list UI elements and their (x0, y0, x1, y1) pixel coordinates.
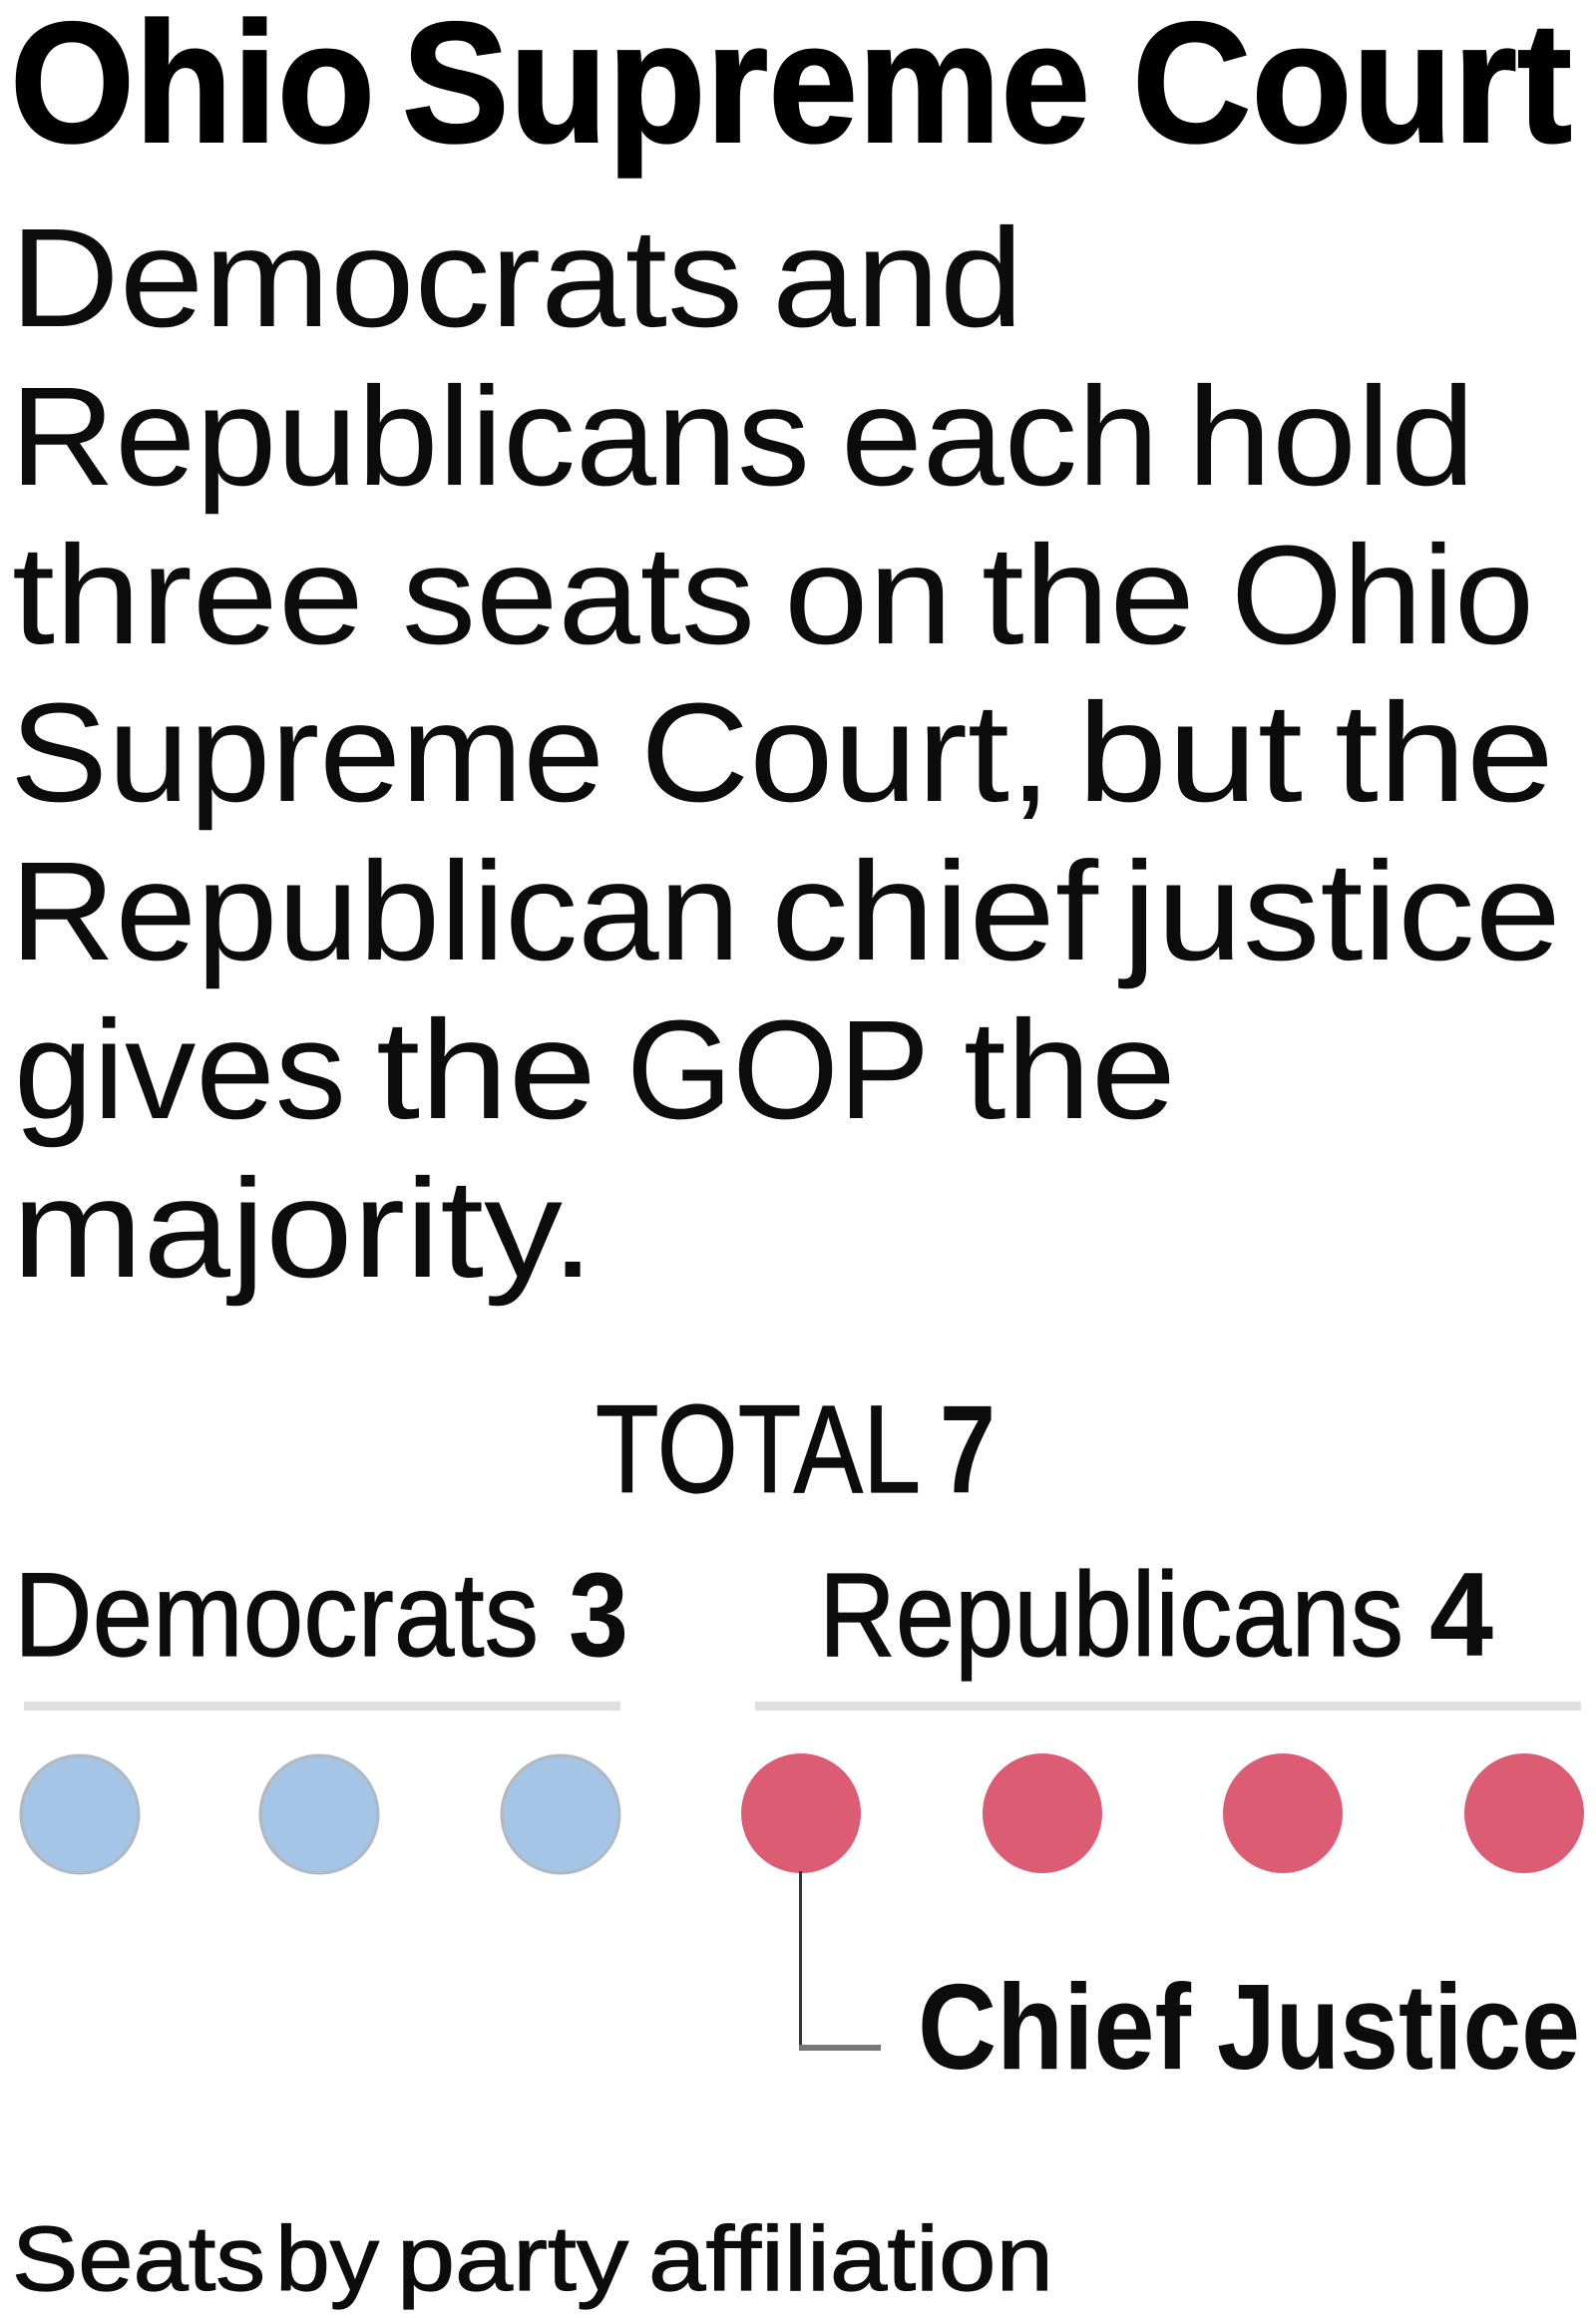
text block: description: chief (771, 832, 1099, 989)
text block: description: gives (14, 990, 346, 1148)
Democrat seats (21, 1755, 619, 1873)
text block: description: Republican (10, 832, 740, 989)
label: Republicans count: 4 (1429, 1548, 1493, 1682)
label: Chief Justice (918, 1959, 1580, 2095)
label: Democrats count: 3 (569, 1548, 628, 1682)
text block: description: Court, (640, 673, 1051, 831)
text block: description: Republicans (10, 357, 810, 515)
text block: description: hold (1187, 357, 1475, 515)
text block: description: majority. (12, 1149, 595, 1307)
Republican seats (741, 1753, 1584, 1873)
label: Republicans count: Republicans (819, 1548, 1403, 1682)
text block: description: on (784, 516, 953, 673)
text block: description: GOP (626, 990, 930, 1148)
text block: description: seats (402, 516, 755, 673)
label: Democrats count: Democrats (14, 1548, 539, 1682)
text block: description: each (841, 357, 1159, 515)
text block: description: but (1077, 673, 1303, 831)
text block: description: Supreme (10, 673, 604, 831)
text block: description: Ohio (1231, 516, 1534, 673)
label: total seats: TOTAL (596, 1380, 921, 1519)
text block: description: the (982, 516, 1195, 673)
label: Chief Justice: Chief (918, 1959, 1191, 2095)
footnote: Seats (12, 2208, 265, 2310)
text block: description: the (1335, 673, 1554, 831)
text block: description (10, 198, 1561, 1307)
footnote (12, 2208, 1053, 2310)
text block: description: three (12, 516, 364, 673)
text block: description: the (964, 990, 1176, 1148)
leader line to chief justice (799, 1871, 881, 2051)
footnote: by (275, 2208, 379, 2310)
rule: Republicans group (755, 1702, 1581, 1711)
text block: description: and (772, 198, 1023, 356)
chart: seats by party (14, 1380, 1584, 2095)
footnote: party (397, 2208, 628, 2310)
footnote: affiliation (648, 2208, 1053, 2310)
text block: description: the (376, 990, 597, 1148)
text block: description: justice (1118, 832, 1561, 989)
title (10, 0, 1572, 179)
rule: Democrats group (24, 1702, 620, 1711)
text block: description: Democrats (10, 198, 743, 356)
label: total seats: 7 (940, 1380, 996, 1519)
